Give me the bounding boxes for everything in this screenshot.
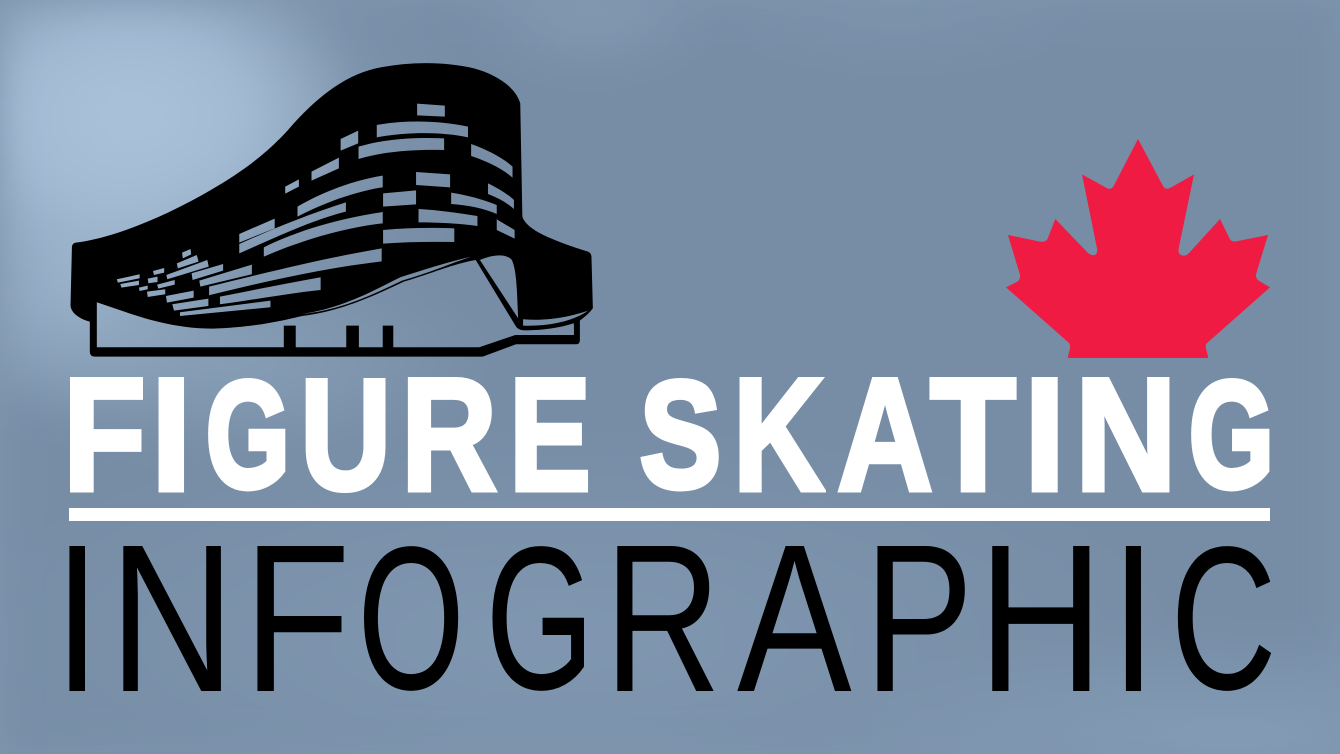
heading: FIGURE SKATING: K	[733, 344, 825, 524]
heading: INFOGRAPHIC: H	[978, 500, 1103, 736]
heading: FIGURE SKATING: E	[509, 344, 591, 524]
heading: INFOGRAPHIC: A	[737, 500, 851, 736]
heading: INFOGRAPHIC: O	[358, 505, 464, 731]
divider rule	[69, 508, 1270, 521]
heading: FIGURE SKATING: R	[401, 344, 497, 524]
heading: INFOGRAPHIC	[54, 500, 1276, 736]
heading: FIGURE SKATING: T	[930, 344, 1016, 524]
heading: INFOGRAPHIC: F	[243, 500, 350, 736]
heading: FIGURE SKATING: G	[206, 350, 290, 519]
heading: INFOGRAPHIC: G	[486, 505, 594, 731]
heading: INFOGRAPHIC: R	[604, 500, 721, 736]
heading: FIGURE SKATING: I	[151, 344, 192, 524]
heading: FIGURE SKATING: I	[1024, 344, 1066, 524]
heading: FIGURE SKATING	[62, 344, 1274, 691]
heading: FIGURE SKATING: A	[837, 344, 933, 524]
heading: INFOGRAPHIC: N	[109, 500, 235, 736]
heading: FIGURE SKATING: G	[1189, 350, 1274, 519]
building silhouette with window cut-outs	[71, 63, 593, 357]
heading: INFOGRAPHIC: I	[54, 500, 100, 736]
heading: INFOGRAPHIC: I	[1111, 500, 1156, 736]
heading: INFOGRAPHIC: P	[864, 500, 973, 736]
icon: red maple leaf	[1006, 139, 1270, 358]
heading: FIGURE SKATING: F	[62, 344, 145, 524]
heading: FIGURE SKATING: N	[1075, 344, 1176, 524]
heading: FIGURE SKATING: S	[640, 350, 721, 519]
heading: INFOGRAPHIC: C	[1171, 505, 1276, 731]
building support pillars	[284, 326, 393, 350]
heading: FIGURE SKATING: U	[300, 346, 391, 523]
